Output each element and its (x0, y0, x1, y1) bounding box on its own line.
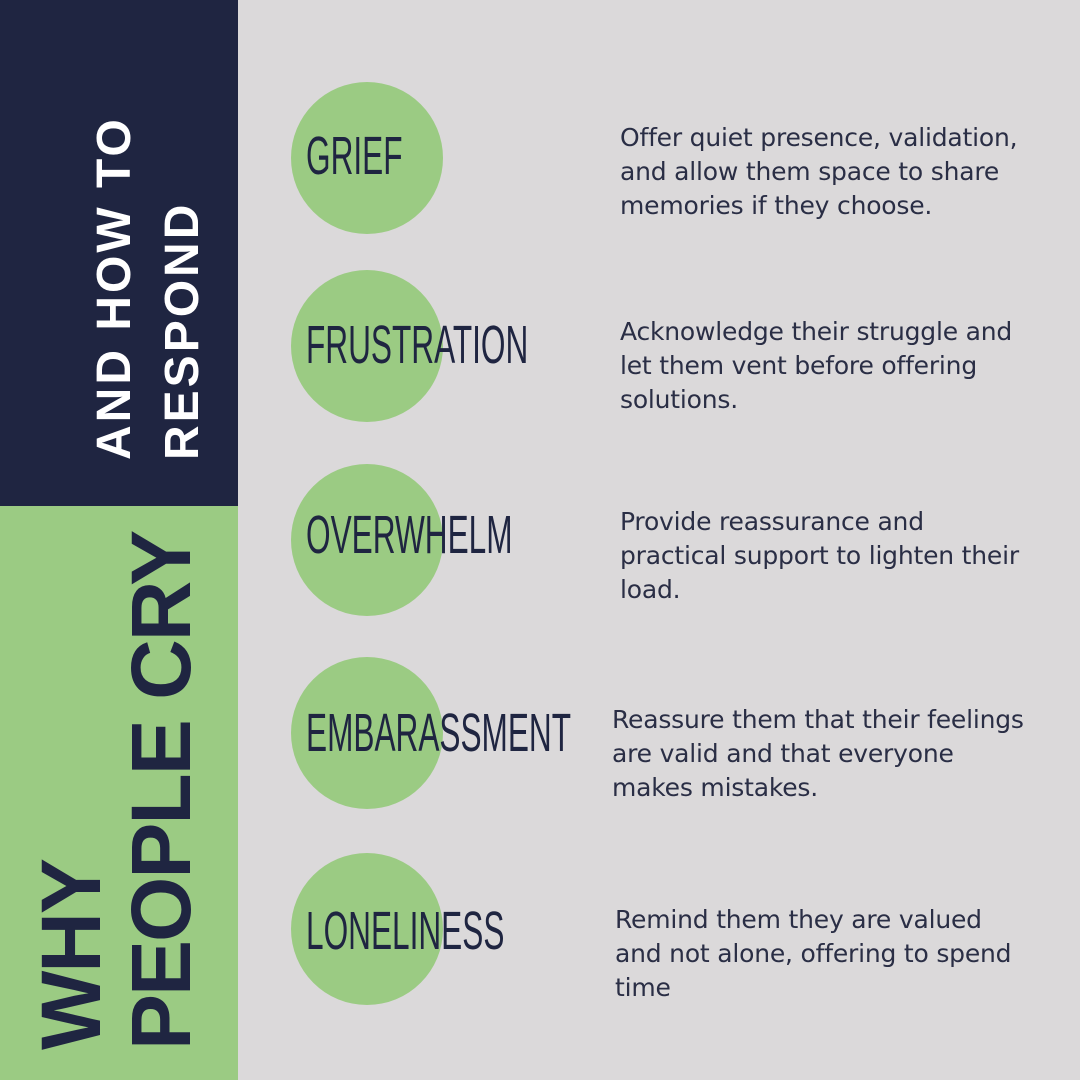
text: embarassment response: Reassure them that their feelings (612, 705, 1024, 734)
text: embarassment response (612, 705, 1024, 802)
title: why people cry (24, 531, 208, 1050)
circle: loneliness (291, 853, 443, 1005)
circle: embarassment (291, 657, 443, 809)
text: frustration response: solutions. (620, 385, 738, 414)
text: grief response: Offer quiet presence, validation, (620, 123, 1017, 152)
text: frustration response (620, 317, 1012, 414)
circle: overwhelm (291, 464, 443, 616)
text: frustration response: let them vent before offering (620, 351, 977, 380)
panel: green title block (0, 506, 238, 1080)
label: overwhelm: OVERWHELM (306, 505, 513, 565)
label: frustration: FRUSTRATION (306, 315, 528, 375)
label: embarassment: EMBARASSMENT (306, 703, 571, 763)
subtitle: and how to respond: RESPOND (156, 202, 209, 460)
text: grief response (620, 123, 1017, 220)
text: overwhelm response: Provide reassurance and (620, 507, 924, 536)
text: grief response: and allow them space to share (620, 157, 999, 186)
text: overwhelm response: practical support to lighten their (620, 541, 1019, 570)
title: why people cry: WHY (24, 860, 118, 1050)
subtitle: and how to respond: AND HOW TO (88, 116, 141, 460)
text: frustration response: Acknowledge their struggle and (620, 317, 1012, 346)
text: loneliness response: Remind them they are valued (615, 905, 982, 934)
title: why people cry: PEOPLE CRY (114, 532, 208, 1050)
text: grief response: memories if they choose. (620, 191, 932, 220)
label: grief: GRIEF (306, 126, 403, 186)
circle: frustration (291, 270, 443, 422)
panel: navy header block (0, 0, 238, 506)
circle: grief (291, 82, 443, 234)
text: overwhelm response (620, 507, 1020, 604)
text: loneliness response: and not alone, offering to spend (615, 939, 1011, 968)
text: embarassment response: makes mistakes. (612, 773, 818, 802)
text: overwhelm response: load. (620, 575, 680, 604)
text: embarassment response: are valid and that everyone (612, 739, 954, 768)
label: loneliness: LONELINESS (306, 901, 504, 961)
text: loneliness response (615, 905, 1011, 1002)
subtitle: and how to respond (88, 116, 209, 460)
text: loneliness response: time (615, 973, 671, 1002)
